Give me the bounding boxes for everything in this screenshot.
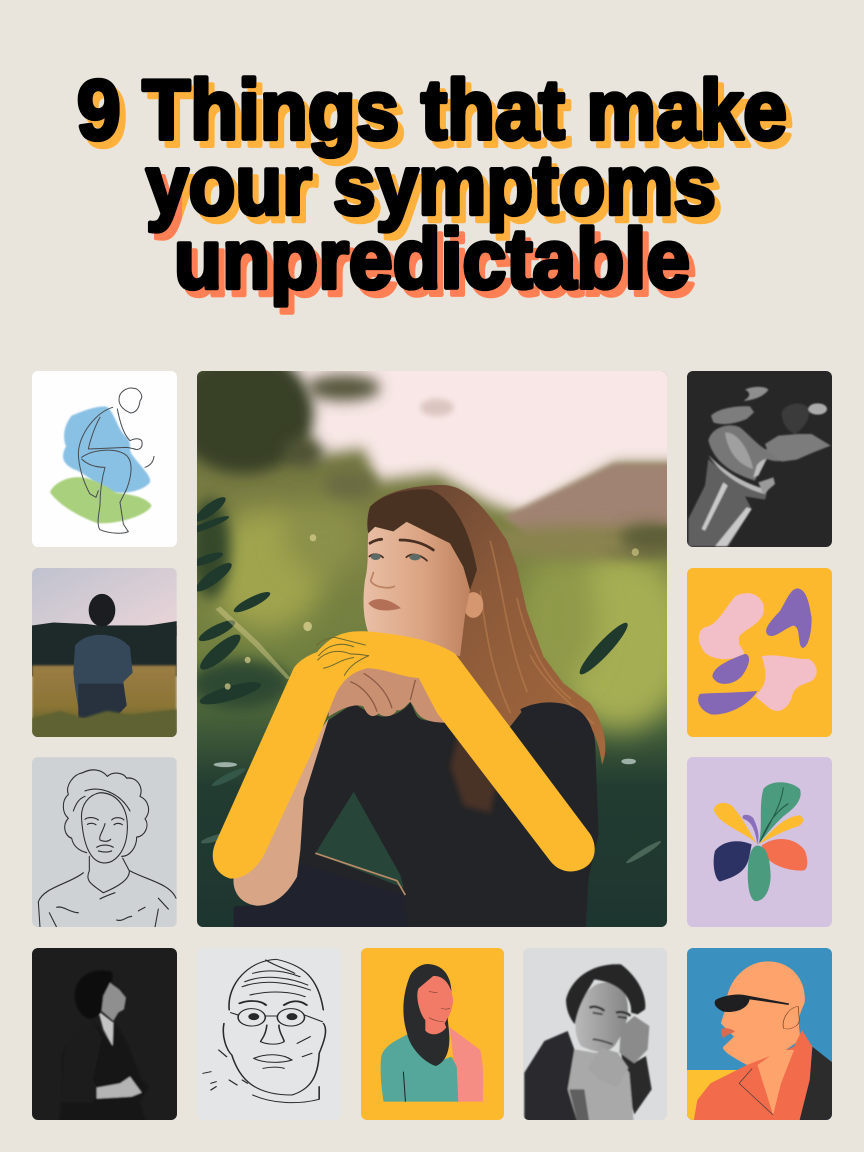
title: 9 Things that make [77,63,787,157]
hair [370,485,605,765]
panel: black and white dancers [687,371,832,547]
panel: yellow with pink and purple abstract shapes [687,567,832,738]
title: unpredictable [174,212,690,306]
facial features [369,539,433,561]
hand under chin [328,668,444,723]
watercolor blue [63,406,150,493]
panel: line drawing of seated man with watercolor [32,371,177,547]
panel: black and white thoughtful man [523,948,667,1123]
panel: flat illustration woman with headscarf on yellow [360,948,504,1121]
panel: flat illustration bald man with sunglasses on blue [687,948,833,1121]
person [73,635,133,718]
fringe [367,489,477,590]
meadow background [197,371,667,927]
hair highlights [480,541,594,724]
leaves [184,493,662,865]
panel: line drawing of older man with glasses [197,948,341,1121]
ear [463,592,483,618]
bokeh and stems [215,534,639,690]
yellow arm shape with finger lines [213,631,595,879]
title [77,63,787,306]
face [363,522,470,656]
title: your symptoms [146,138,716,232]
lower body navy [274,900,276,902]
panel: black and white woman in dark blazer [32,948,177,1123]
panel: line drawing of a curly-haired woman [32,757,177,928]
figure outline [78,388,154,533]
shoulder [520,702,595,749]
skin streak [315,853,405,895]
panel: main photo of woman in a meadow with yellow arm [197,371,667,927]
forearm [233,718,329,906]
hair strands over sweater [449,738,497,814]
panel: photo of person seen from behind in a field [32,567,177,738]
panel: lilac with botanical petals [687,757,832,928]
meadow gap under knee [315,792,404,888]
watercolor green [50,477,152,523]
sweater torso [298,702,598,927]
